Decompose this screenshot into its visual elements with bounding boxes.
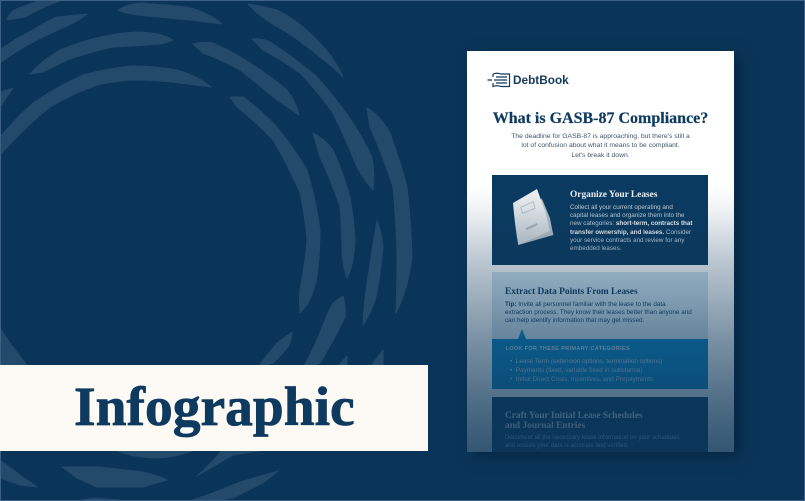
categories list: • Initial Direct Costs, Incentives, and Prepayments	[510, 376, 653, 382]
body text: transfer ownership, and leases. Consider	[570, 229, 691, 236]
body text	[505, 434, 680, 449]
heading: Organize Your Leases	[570, 190, 658, 200]
heading: Extract Data Points From Leases	[505, 287, 638, 297]
title: What is GASB-87 Compliance?	[493, 110, 708, 127]
tip text: can help identify information that may get missed.	[505, 317, 644, 324]
body text	[570, 204, 692, 252]
categories list: • Lease Term (extension options, termination options)	[510, 358, 662, 364]
heading	[505, 411, 643, 431]
tip text	[505, 300, 692, 324]
body text: Document all the necessary lease information on your schedules	[505, 434, 679, 441]
body text: and ensure your data is accurate and verified.	[505, 442, 629, 449]
banner title: Infographic	[74, 377, 355, 438]
panel: organize your leases	[492, 175, 708, 265]
heading: and Journal Entries	[505, 421, 585, 431]
tip text: Tip: Invite all personnel familiar with the lease to the data	[505, 300, 666, 308]
infographic document preview	[467, 51, 734, 452]
intro text: lot of confusion about what it means to be compliant.	[521, 142, 680, 149]
fade overlay	[467, 51, 734, 452]
body text: Collect all your current operating and	[570, 204, 673, 211]
categories block	[492, 339, 708, 389]
icon: ledger logo	[488, 72, 510, 88]
DebtBook logo: DebtBook	[513, 73, 569, 87]
body text: new categories: short-term, contracts that	[570, 220, 692, 227]
categories heading: LOOK FOR THESE PRIMARY CATEGORIES	[506, 346, 630, 352]
tip text: extraction process. They know their leases better than anyone and	[505, 309, 692, 316]
pointer	[518, 329, 526, 339]
categories list	[510, 358, 662, 382]
categories list: • Payments (fixed, variable fixed in substance)	[510, 366, 643, 374]
DebtBook logo	[488, 72, 569, 88]
intro text	[511, 133, 690, 159]
heading: Craft Your Initial Lease Schedules	[505, 411, 643, 421]
body text: your service contracts and review for any	[570, 237, 684, 244]
intro text: Let's break it down.	[571, 152, 630, 159]
banner	[0, 365, 428, 451]
body text: embedded leases.	[570, 245, 621, 252]
body text: capital leases and organize them into the	[570, 212, 684, 219]
intro text: The deadline for GASB-87 is approaching, but there's still a	[511, 133, 690, 140]
panel: extract data points	[492, 272, 708, 389]
panel: craft initial lease schedules	[492, 397, 708, 457]
icon: folder	[513, 189, 554, 245]
